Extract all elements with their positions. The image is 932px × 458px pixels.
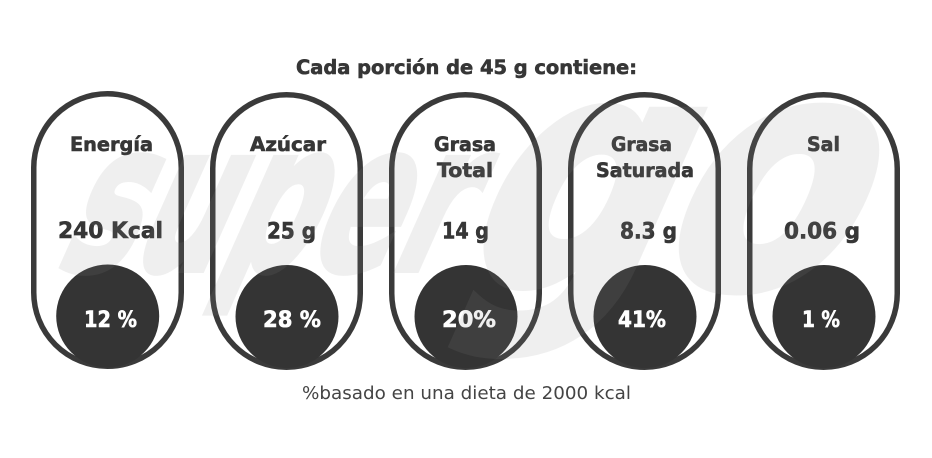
value: 8.3 g: 8.3 g [620,220,677,244]
percent: 28 %: 28 % [263,307,321,333]
label: Sal: Sal [807,133,840,156]
value: 0.06 g: 0.06 g [784,220,860,244]
icon: Sal percent circle [772,265,876,368]
title: Cada porción de 45 g contiene: [296,56,637,79]
watermark: super logo: super [30,80,532,319]
percent: 12 %: 12 % [84,307,137,333]
label: Grasa Saturada: Saturada [596,159,694,182]
label: Grasa Saturada: Grasa [611,133,672,156]
panel: Energía [34,94,181,368]
watermark: super logo [30,0,932,359]
label: Grasa Total: Total [437,159,493,182]
footnote: %basado en una dieta de 2000 kcal [302,383,631,404]
icon: Energía percent circle [56,264,159,368]
icon: Azúcar percent circle [236,265,338,368]
label: Grasa Total: Grasa [434,133,496,156]
value: 240 Kcal: 240 Kcal [58,219,163,244]
panel: Grasa Total [392,95,539,368]
percent: 1 %: 1 % [802,307,840,333]
icon: Grasa Saturada percent circle [594,265,696,368]
panel: Azúcar [213,95,360,368]
panel: Grasa Saturada [571,95,718,368]
label: Energía: Energía [70,133,153,156]
icon: Grasa Total percent circle [414,265,518,368]
value: 25 g: 25 g [267,220,316,244]
panel: Sal [750,95,897,368]
percent: 41%: 41% [618,307,666,333]
label: Azúcar: Azúcar [250,133,326,156]
percent: 20%: 20% [442,307,496,333]
value: 14 g: 14 g [442,220,489,244]
